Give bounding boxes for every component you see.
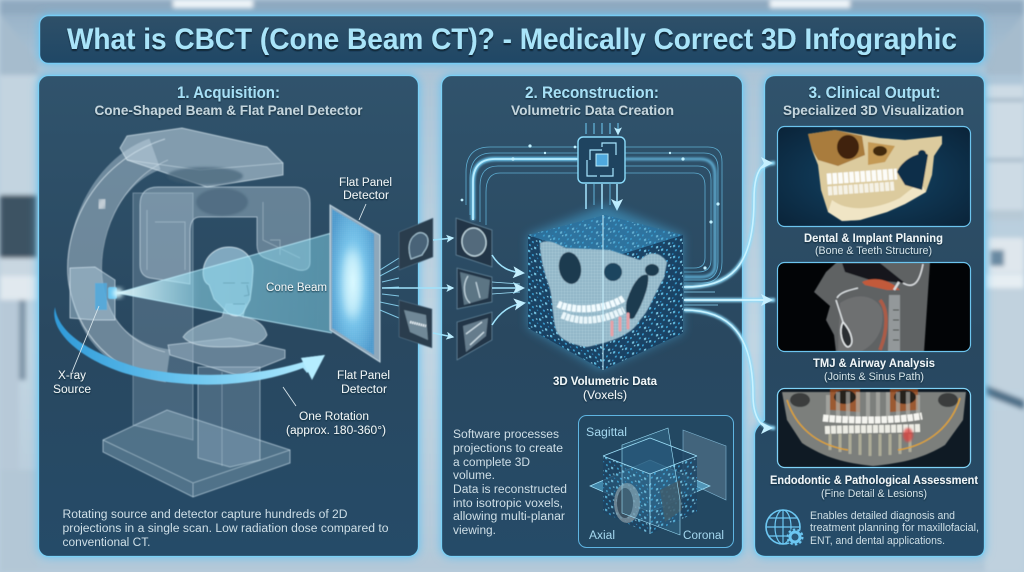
patient head and shoulders: [183, 247, 267, 347]
panel 3 frame: [754, 75, 985, 557]
CBCT machine: [68, 128, 380, 497]
panel 1 frame: [38, 75, 419, 557]
panel 3 heading: [783, 83, 964, 118]
panel 2 frame: [441, 75, 743, 557]
labels: (approx. 180-360°): [286, 425, 386, 437]
C-arm arc: [85, 154, 168, 366]
thumbnail: jaw: [399, 300, 432, 348]
output connector arrows: [684, 163, 775, 428]
endodontic caption: (Fine Detail & Lesions): [821, 488, 927, 500]
multi-planar inset: Axial: [589, 530, 615, 542]
panel 3 heading: Specialized 3D Visualization: [783, 102, 964, 118]
processor chip icon: [578, 137, 625, 183]
labels: One Rotation: [299, 411, 369, 423]
panel 2 heading: [511, 83, 674, 118]
voxel cube with skull: [528, 205, 683, 370]
airway caption: [813, 358, 935, 383]
machine base: [103, 410, 290, 497]
projection thumbnails: [399, 218, 492, 360]
data flow circuit lines: [461, 123, 722, 283]
panel 1 description: projections in a single scan. Low radiation dose compared to: [62, 523, 388, 535]
panel 2 description: viewing.: [453, 525, 496, 537]
panel 1 heading: Cone-Shaped Beam & Flat Panel Detector: [94, 102, 363, 118]
panel 2 heading: Volumetric Data Creation: [511, 102, 674, 118]
panel 3 description: Enables detailed diagnosis and: [810, 510, 955, 522]
panel 3 description: ENT, and dental applications.: [810, 535, 945, 547]
title bar: [39, 15, 985, 64]
endodontic caption: [770, 475, 978, 500]
airway caption: TMJ & Airway Analysis: [813, 358, 935, 370]
labels: Flat Panel: [337, 370, 390, 382]
panel 3 description: treatment planning for maxillofacial,: [810, 522, 979, 534]
airway caption: (Joints & Sinus Path): [824, 371, 924, 383]
projection streaks: [380, 258, 399, 318]
panel 1 heading: [94, 83, 363, 118]
panel 2 description: Software processes: [453, 429, 559, 441]
skull in voxels: [540, 241, 667, 347]
flow arrows: [382, 238, 524, 337]
planes cube: [590, 428, 710, 535]
labels: Flat Panel: [339, 177, 392, 189]
cube center beam: [602, 215, 604, 370]
coronal slice plane: [683, 430, 726, 500]
cone beam: [117, 227, 353, 333]
volumetric data caption: [553, 376, 658, 402]
rear column: [133, 193, 193, 440]
thumbnail: coronal slice: [457, 312, 492, 360]
panel 2 description: projections to create: [453, 443, 563, 455]
top housing: [120, 128, 283, 187]
rotation arrow: [54, 307, 325, 385]
volumetric data caption: 3D Volumetric Data: [553, 376, 658, 388]
endodontic caption: Endodontic & Pathological Assessment: [770, 475, 978, 487]
thumbnail: side skull: [399, 218, 433, 270]
x-ray source: [70, 267, 115, 320]
labels: Cone Beam: [266, 282, 327, 294]
multi-planar inset: Coronal: [683, 530, 724, 542]
flat panel detector: [330, 205, 380, 362]
dental caption: (Bone & Teeth Structure): [815, 245, 932, 257]
panel 1 heading: 1. Acquisition:: [177, 83, 280, 102]
plane labels: Sagittal: [586, 427, 627, 439]
table post: [198, 367, 260, 467]
panel 3 heading: 3. Clinical Output:: [808, 83, 940, 102]
portal frame: [140, 187, 310, 284]
icon: globe with gear: [766, 510, 804, 546]
cube faces: [528, 215, 683, 370]
thumbnail: sagittal slice: [457, 268, 492, 309]
panel 2 description: allowing multi-planar: [453, 511, 565, 523]
title text: What is CBCT (Cone Beam CT)? - Medically Correct 3D Infographic: [67, 23, 957, 56]
panel 2: reconstruction: [382, 75, 743, 557]
labels: X-ray: [58, 370, 86, 382]
panel 2 description: [453, 429, 567, 537]
volumetric data caption: (Voxels): [583, 390, 627, 402]
cube glow: [528, 205, 683, 370]
labels: Detector: [343, 190, 389, 202]
labels: [53, 177, 392, 437]
panel 2 heading: 2. Reconstruction:: [525, 83, 659, 102]
thumbnail: axial slice: [456, 218, 492, 267]
image: panoramic x-ray: [777, 388, 971, 468]
dental caption: Dental & Implant Planning: [804, 233, 943, 245]
labels: Source: [53, 384, 91, 396]
multi-planar inset: [578, 416, 734, 548]
dental caption: [804, 233, 943, 257]
patient table: [168, 338, 285, 376]
panel 3: clinical output: [754, 75, 985, 557]
panel 3 description: [810, 510, 979, 547]
panel 1: acquisition: [38, 75, 419, 557]
panel 2 description: volume.: [453, 470, 495, 482]
panel 1 description: Rotating source and detector capture hundreds of 2D: [62, 509, 348, 521]
image: 3D dental skull: [777, 126, 971, 227]
panel 2 description: into isotropic voxels,: [453, 498, 563, 510]
panel 1 description: [62, 509, 388, 549]
image: sagittal airway scan: [777, 262, 971, 352]
labels: Detector: [341, 384, 387, 396]
panel 2 description: Data is reconstructed: [453, 484, 567, 496]
panel 2 description: a complete 3D: [453, 457, 530, 469]
panel 1 description: conventional CT.: [62, 537, 150, 549]
callout leader lines: [72, 204, 366, 406]
